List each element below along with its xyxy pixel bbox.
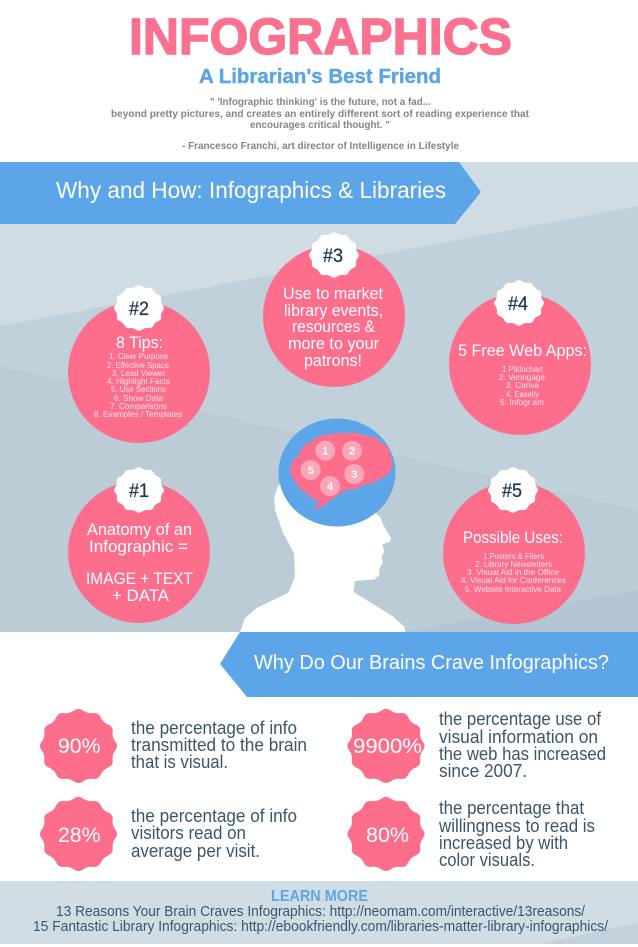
- uses heading: Possible Uses:: [463, 528, 563, 547]
- tips list: 3. Lead Viewer: [112, 368, 165, 378]
- quote: encourages critical thought. ": [250, 119, 390, 131]
- quote: [111, 96, 529, 152]
- learn more links: [33, 903, 609, 935]
- banner: why and how: Why and How: Infographics & Libraries: [56, 177, 446, 203]
- banner: why and how: [0, 162, 481, 224]
- stat: 9900%: [347, 709, 606, 783]
- tips heading: 8 Tips:: [116, 333, 163, 352]
- uses list: 4. Visual Aid for Conferences: [461, 575, 566, 585]
- stat: 90%: that is visual.: [131, 752, 228, 772]
- market text: more to your: [288, 334, 379, 353]
- badge 1: [114, 467, 164, 513]
- panel: tip 3: [263, 232, 405, 387]
- badge 3: [309, 232, 359, 278]
- anatomy text: [86, 520, 193, 605]
- web apps list: 2. Venngage: [499, 372, 545, 382]
- anatomy text: IMAGE + TEXT: [86, 569, 193, 588]
- web apps list: 4. Easelly: [506, 389, 540, 399]
- brain numbers: 4: [327, 481, 334, 493]
- tips list: 7. Comparisons: [110, 401, 167, 411]
- market text: resources &: [292, 317, 376, 336]
- tips list: 2. Effective Space: [107, 360, 169, 370]
- stat: 90%: 90%: [58, 735, 100, 758]
- brain numbers: [301, 441, 364, 496]
- head silhouette: [240, 485, 405, 632]
- stat: 28%: visitors read on: [131, 823, 246, 843]
- tips list: [94, 351, 182, 419]
- web apps list: 3. Canva: [506, 380, 539, 390]
- brain: [291, 433, 392, 509]
- stat: 28%: average per visit.: [131, 841, 260, 861]
- stat: 80%: color visuals.: [439, 850, 535, 870]
- panel: tip 1: [68, 467, 210, 623]
- anatomy text: Infographic =: [89, 537, 188, 556]
- badge 5: [488, 467, 538, 513]
- panel: background: [0, 162, 638, 632]
- web apps list: 5. Infogr.am: [500, 397, 544, 407]
- market text: patrons!: [304, 351, 362, 370]
- badge 2: [114, 285, 164, 331]
- brain numbers: 3: [351, 469, 357, 481]
- panel: tip 5: [443, 467, 585, 624]
- badge 3: #3: [323, 246, 343, 267]
- blue head circle: [278, 418, 396, 526]
- panel: learn more: [0, 881, 638, 944]
- banner: brains crave: Why Do Our Brains Crave Infographics?: [254, 652, 609, 674]
- brain numbers: 1: [322, 446, 328, 458]
- tips list: 1. Clear Purpose: [109, 351, 168, 361]
- stat: 80%: increased by with: [439, 833, 568, 853]
- uses list: 5. Website Interactive Data: [465, 584, 561, 594]
- anatomy text: Anatomy of an: [87, 520, 192, 539]
- learn more heading: LEARN MORE: [271, 888, 368, 905]
- stat: 90%: [40, 709, 307, 783]
- stat: 9900%: 9900%: [353, 735, 422, 758]
- stat: 9900%: the percentage use of: [439, 709, 602, 729]
- uses list: 2. Library Newsletters: [475, 559, 552, 569]
- badge 4: [494, 280, 544, 326]
- tips list: 5. Use Sections: [111, 384, 166, 394]
- market text: [283, 284, 383, 370]
- market text: Use to market: [283, 284, 383, 303]
- anatomy text: + DATA: [112, 586, 170, 605]
- uses list: 3. Visual Aid in the Office: [467, 567, 559, 577]
- stat: 80%: the percentage that: [439, 798, 584, 818]
- head illustration: [240, 418, 405, 632]
- stat: 28%: [40, 797, 297, 871]
- stat: 90%: transmitted to the brain: [131, 735, 307, 755]
- tips list: 8. Examples / Templates: [94, 409, 182, 419]
- stat: 80%: 80%: [366, 824, 409, 847]
- quote: " 'Infographic thinking' is the future, not a fad...: [210, 96, 431, 108]
- stat: 90%: the percentage of info: [131, 718, 297, 738]
- panel: tip 4: [449, 280, 591, 435]
- badge 4: #4: [508, 294, 528, 315]
- uses list: 1.Posters & Fliers: [483, 551, 544, 561]
- tips list: 4. Highlight Facts: [107, 376, 170, 386]
- web apps heading: 5 Free Web Apps:: [458, 341, 587, 360]
- stat: 9900%: since 2007.: [439, 761, 527, 781]
- market text: library events,: [284, 301, 383, 320]
- stat: 80%: [347, 797, 595, 871]
- web apps list: 1.Piktochart: [502, 364, 544, 374]
- stat: 9900%: the web has increased: [439, 744, 606, 764]
- subtitle: A Librarian's Best Friend: [199, 65, 441, 88]
- stat: 28%: the percentage of info: [131, 806, 297, 826]
- uses list: [461, 551, 566, 594]
- quote: beyond pretty pictures, and creates an entirely different sort of reading experience that: [111, 108, 529, 120]
- badge 1: #1: [129, 481, 149, 502]
- stat: 80%: willingness to read is: [438, 816, 595, 836]
- panel: tip 2: [68, 285, 210, 443]
- stat: 28%: 28%: [58, 824, 100, 847]
- banner: brains crave: [220, 632, 638, 697]
- tips list: 6. Show Data: [114, 393, 163, 403]
- badge 2: #2: [129, 299, 149, 320]
- brain numbers: 5: [308, 465, 314, 477]
- web apps list: [499, 364, 545, 407]
- learn more links: 13 Reasons Your Brain Craves Infographics: http://neomam.com/interactive/13reasons/: [56, 903, 586, 920]
- badge 5: #5: [502, 481, 522, 502]
- stat: 9900%: visual information on: [439, 727, 598, 747]
- title: INFOGRAPHICS: [129, 8, 512, 65]
- quote: - Francesco Franchi, art director of Intelligence in Lifestyle: [182, 140, 459, 152]
- brain numbers: 2: [349, 446, 355, 458]
